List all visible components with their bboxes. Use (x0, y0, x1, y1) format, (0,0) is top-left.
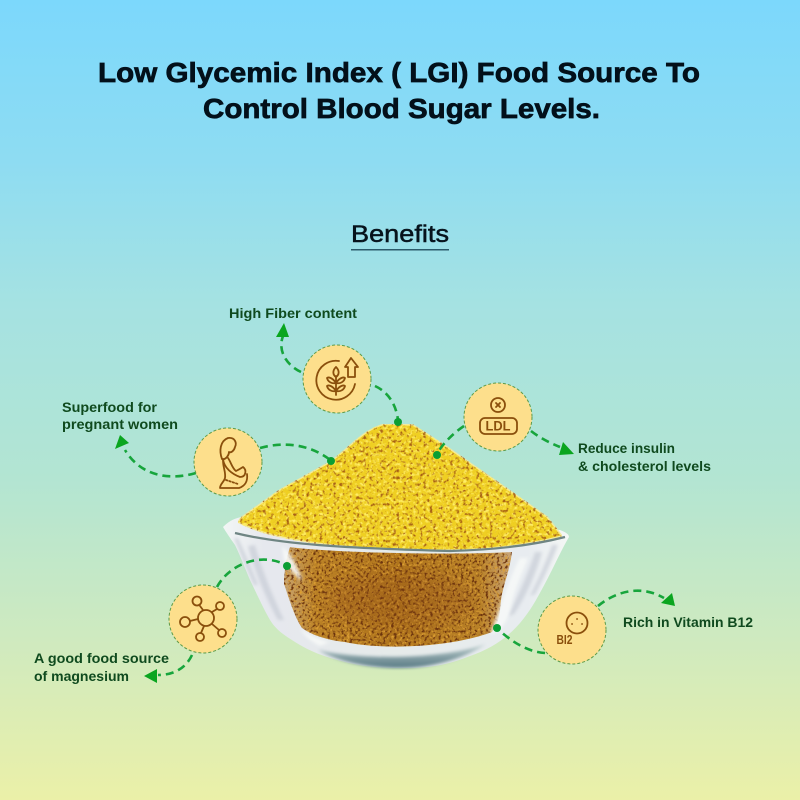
label: magnesium: of magnesium (34, 669, 129, 684)
millet mound (238, 424, 562, 550)
benefit: reduce insulin and cholesterol (433, 383, 711, 474)
title: Control Blood Sugar Levels. (203, 93, 600, 124)
label: superfood (62, 400, 178, 432)
bowl base shadow (318, 644, 486, 668)
icon: ldl badge (464, 383, 532, 451)
connector: pregnant to grain (260, 445, 335, 465)
millet inside the bowl (284, 547, 512, 647)
icon: wheat with up arrow (303, 345, 371, 413)
icon: ldl badge: LDL (486, 418, 511, 434)
benefit: magnesium (34, 560, 291, 684)
arrow: ldl to label (531, 431, 574, 455)
arrow: b12 to label (598, 591, 675, 606)
label: reduce insulin: & cholesterol levels (578, 459, 711, 474)
connector: ldl to grain (433, 426, 464, 459)
arrow: fiber to label (276, 323, 301, 372)
title (98, 57, 700, 124)
label: high fiber: High Fiber content (229, 306, 358, 321)
label: magnesium (34, 651, 170, 684)
bowl glass body (223, 517, 569, 668)
connector: molecule to grain (217, 560, 291, 587)
icon: b12: BI2 (556, 632, 572, 647)
benefit: superfood for pregnant women (62, 400, 335, 496)
connector: fiber to grain (375, 386, 402, 426)
label: superfood: Superfood for (62, 400, 158, 415)
label: reduce insulin (578, 441, 711, 474)
connector: b12 to grain (493, 624, 545, 653)
bowl rim (235, 533, 565, 551)
icon: pregnant woman (194, 428, 262, 496)
title: Low Glycemic Index ( LGI) Food Source To (98, 57, 700, 88)
bowl of millet (223, 424, 569, 668)
arrow: molecule to label (144, 655, 192, 683)
arrow: pregnant to label (115, 435, 196, 476)
label: reduce insulin: Reduce insulin (578, 441, 675, 456)
benefit: high fiber (229, 306, 402, 426)
label: vitamin b12: Rich in Vitamin B12 (623, 615, 753, 630)
icon: b12 (538, 596, 606, 664)
label: magnesium: A good food source (34, 651, 170, 666)
icon: molecule (169, 585, 237, 653)
benefit: vitamin b12 (493, 591, 753, 664)
glass streaks (234, 538, 558, 620)
heading: benefits: Benefits (351, 221, 449, 248)
label: superfood: pregnant women (62, 417, 178, 432)
glass highlights (282, 546, 528, 646)
